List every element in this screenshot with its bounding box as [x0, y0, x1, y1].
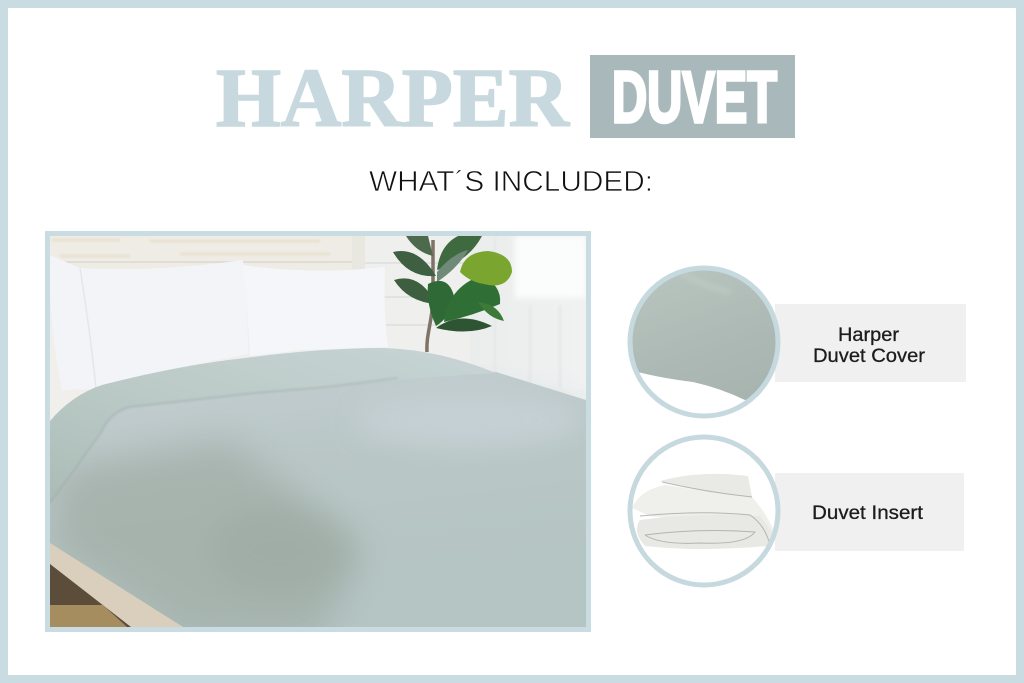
label text: Duvet Insert — [812, 502, 924, 524]
photo frame — [48, 234, 588, 630]
panel: bedroom photo — [48, 234, 588, 640]
floor and rug — [50, 564, 131, 627]
title — [216, 52, 795, 145]
label text — [813, 324, 926, 367]
bed frame — [50, 543, 183, 627]
circle image: fabric swatch — [628, 262, 780, 418]
label box — [775, 304, 966, 382]
right pillow — [243, 265, 388, 356]
title word: Harper: HARPER — [216, 52, 570, 145]
title badge: Duvet — [590, 55, 795, 138]
item: duvet cover — [628, 262, 966, 418]
label text: Harper — [838, 324, 900, 346]
subtitle: WHAT´S INCLUDED: — [369, 166, 653, 198]
circle image: folded insert — [628, 435, 780, 587]
duvet shading — [50, 398, 570, 627]
fold shadow line — [76, 377, 398, 466]
wall and wainscot — [365, 262, 464, 326]
duvet body — [50, 372, 586, 627]
label box — [775, 473, 964, 551]
plant — [393, 236, 512, 352]
label text: Duvet Cover — [813, 345, 926, 367]
headboard — [50, 236, 365, 270]
sheet beneath pillows — [50, 330, 110, 440]
title badge: Duvet: DUVET — [612, 58, 777, 138]
left pillow — [50, 255, 248, 390]
duvet fold — [50, 348, 494, 482]
curtain and window — [516, 236, 586, 298]
item: duvet insert — [628, 435, 964, 587]
